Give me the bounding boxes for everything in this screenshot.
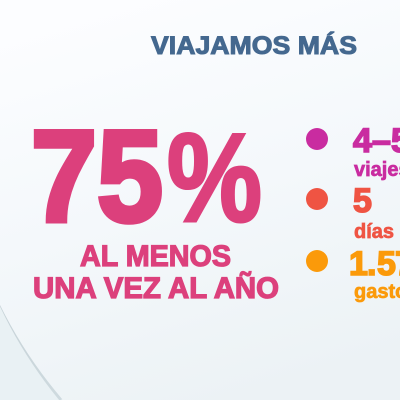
- bullet: magenta: [306, 128, 328, 150]
- statistic caption: AL MENOS: [80, 240, 231, 273]
- main statistic: 75%: [31, 103, 262, 249]
- bullet: orange: [306, 250, 328, 272]
- list item: days: [306, 182, 394, 243]
- title: VIAJAMOS MÁS: [151, 31, 357, 60]
- statistic caption: [33, 240, 279, 305]
- list item: days: 5: [353, 182, 372, 220]
- list item: trips: [306, 122, 400, 181]
- bullet: coral: [306, 188, 328, 210]
- circle edge shadow: [0, 303, 61, 400]
- main statistic: 75%: %: [167, 109, 262, 248]
- list item: days: días: [354, 221, 394, 243]
- main statistic: 75%: 75: [31, 103, 163, 249]
- statistic caption: UNA VEZ AL AÑO: [33, 271, 279, 305]
- list item: spending: [306, 245, 400, 303]
